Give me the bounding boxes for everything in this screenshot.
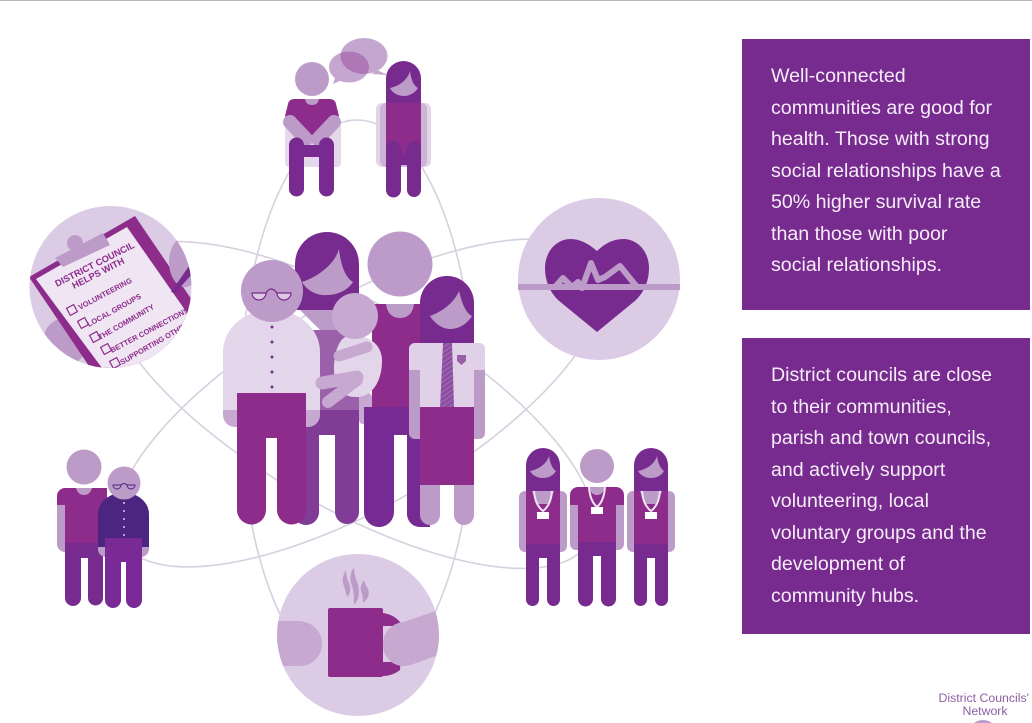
panel: district councils text: voluntary groups and the <box>771 522 987 544</box>
panel: district councils text: to their communities, <box>771 396 952 418</box>
logo: District Councils' Network: Network <box>962 704 1008 718</box>
volunteer right <box>627 448 675 606</box>
steam <box>343 567 369 605</box>
clipboard paper <box>36 227 192 372</box>
panel: health benefits text: Well-connected <box>771 65 906 87</box>
checklist text: DISTRICT COUNCIL <box>53 240 136 289</box>
hand left <box>277 621 322 666</box>
icon: clipboard in circle <box>29 206 201 372</box>
older person with glasses <box>98 466 149 608</box>
standing person <box>57 450 107 606</box>
panel: district councils text <box>742 338 1030 634</box>
panel: health benefits text: communities are good for <box>771 96 992 118</box>
checklist text: BETTER CONNECTIONS <box>109 306 190 355</box>
clipboard board <box>29 216 194 372</box>
mug <box>383 613 400 676</box>
volunteer left <box>519 448 567 606</box>
older man with glasses <box>223 260 320 524</box>
group: volunteers with lanyards <box>519 448 675 606</box>
panel: health benefits text: 50% higher survival rate <box>771 191 981 213</box>
man behind <box>364 232 432 527</box>
checklist text: LOCAL GROUPS <box>86 292 143 329</box>
panel: district councils text: volunteering, local <box>771 490 929 512</box>
lower hand <box>44 320 82 362</box>
speech bubbles <box>329 38 388 84</box>
seated person left <box>285 62 341 196</box>
panel: district councils text: parish and town councils, <box>771 427 991 449</box>
panel: district councils text: development of <box>771 553 905 575</box>
panel: district councils text: and actively support <box>771 458 945 480</box>
panel: health benefits text <box>742 39 1030 310</box>
central family group <box>223 232 485 527</box>
panel: health benefits text: social relationships have a <box>771 160 1001 182</box>
checklist text: VOLUNTEERING <box>77 276 134 312</box>
panel: health benefits text: than those with poor <box>771 222 947 244</box>
hand right <box>383 611 439 666</box>
standing person right <box>376 61 431 198</box>
checklist text: THE COMMUNITY <box>96 302 156 342</box>
group: older couple <box>57 450 149 608</box>
checkboxes <box>67 305 120 368</box>
panel: health benefits text: social relationships. <box>771 254 942 276</box>
volunteer middle <box>570 449 624 606</box>
logo: District Councils' Network <box>938 692 1029 723</box>
hand with pen <box>169 240 192 293</box>
panel: district councils text: community hubs. <box>771 584 919 606</box>
group: two people talking <box>285 38 431 198</box>
panel: health benefits text: health. Those with strong <box>771 128 990 150</box>
girl in school uniform <box>409 276 485 525</box>
panel: district councils text: District councils are close <box>771 364 992 386</box>
woman behind holding baby <box>293 232 372 525</box>
icon: heart with pulse in circle <box>518 198 680 360</box>
baby <box>322 293 382 402</box>
orbit lines connecting the groups <box>61 120 650 684</box>
checklist text <box>53 240 195 367</box>
clipboard clip <box>55 233 110 267</box>
checklist text: SUPPORTING OTHERS <box>118 317 195 367</box>
checklist text: HELPS WITH <box>70 256 126 291</box>
icon: mug with hands in circle <box>270 554 445 716</box>
